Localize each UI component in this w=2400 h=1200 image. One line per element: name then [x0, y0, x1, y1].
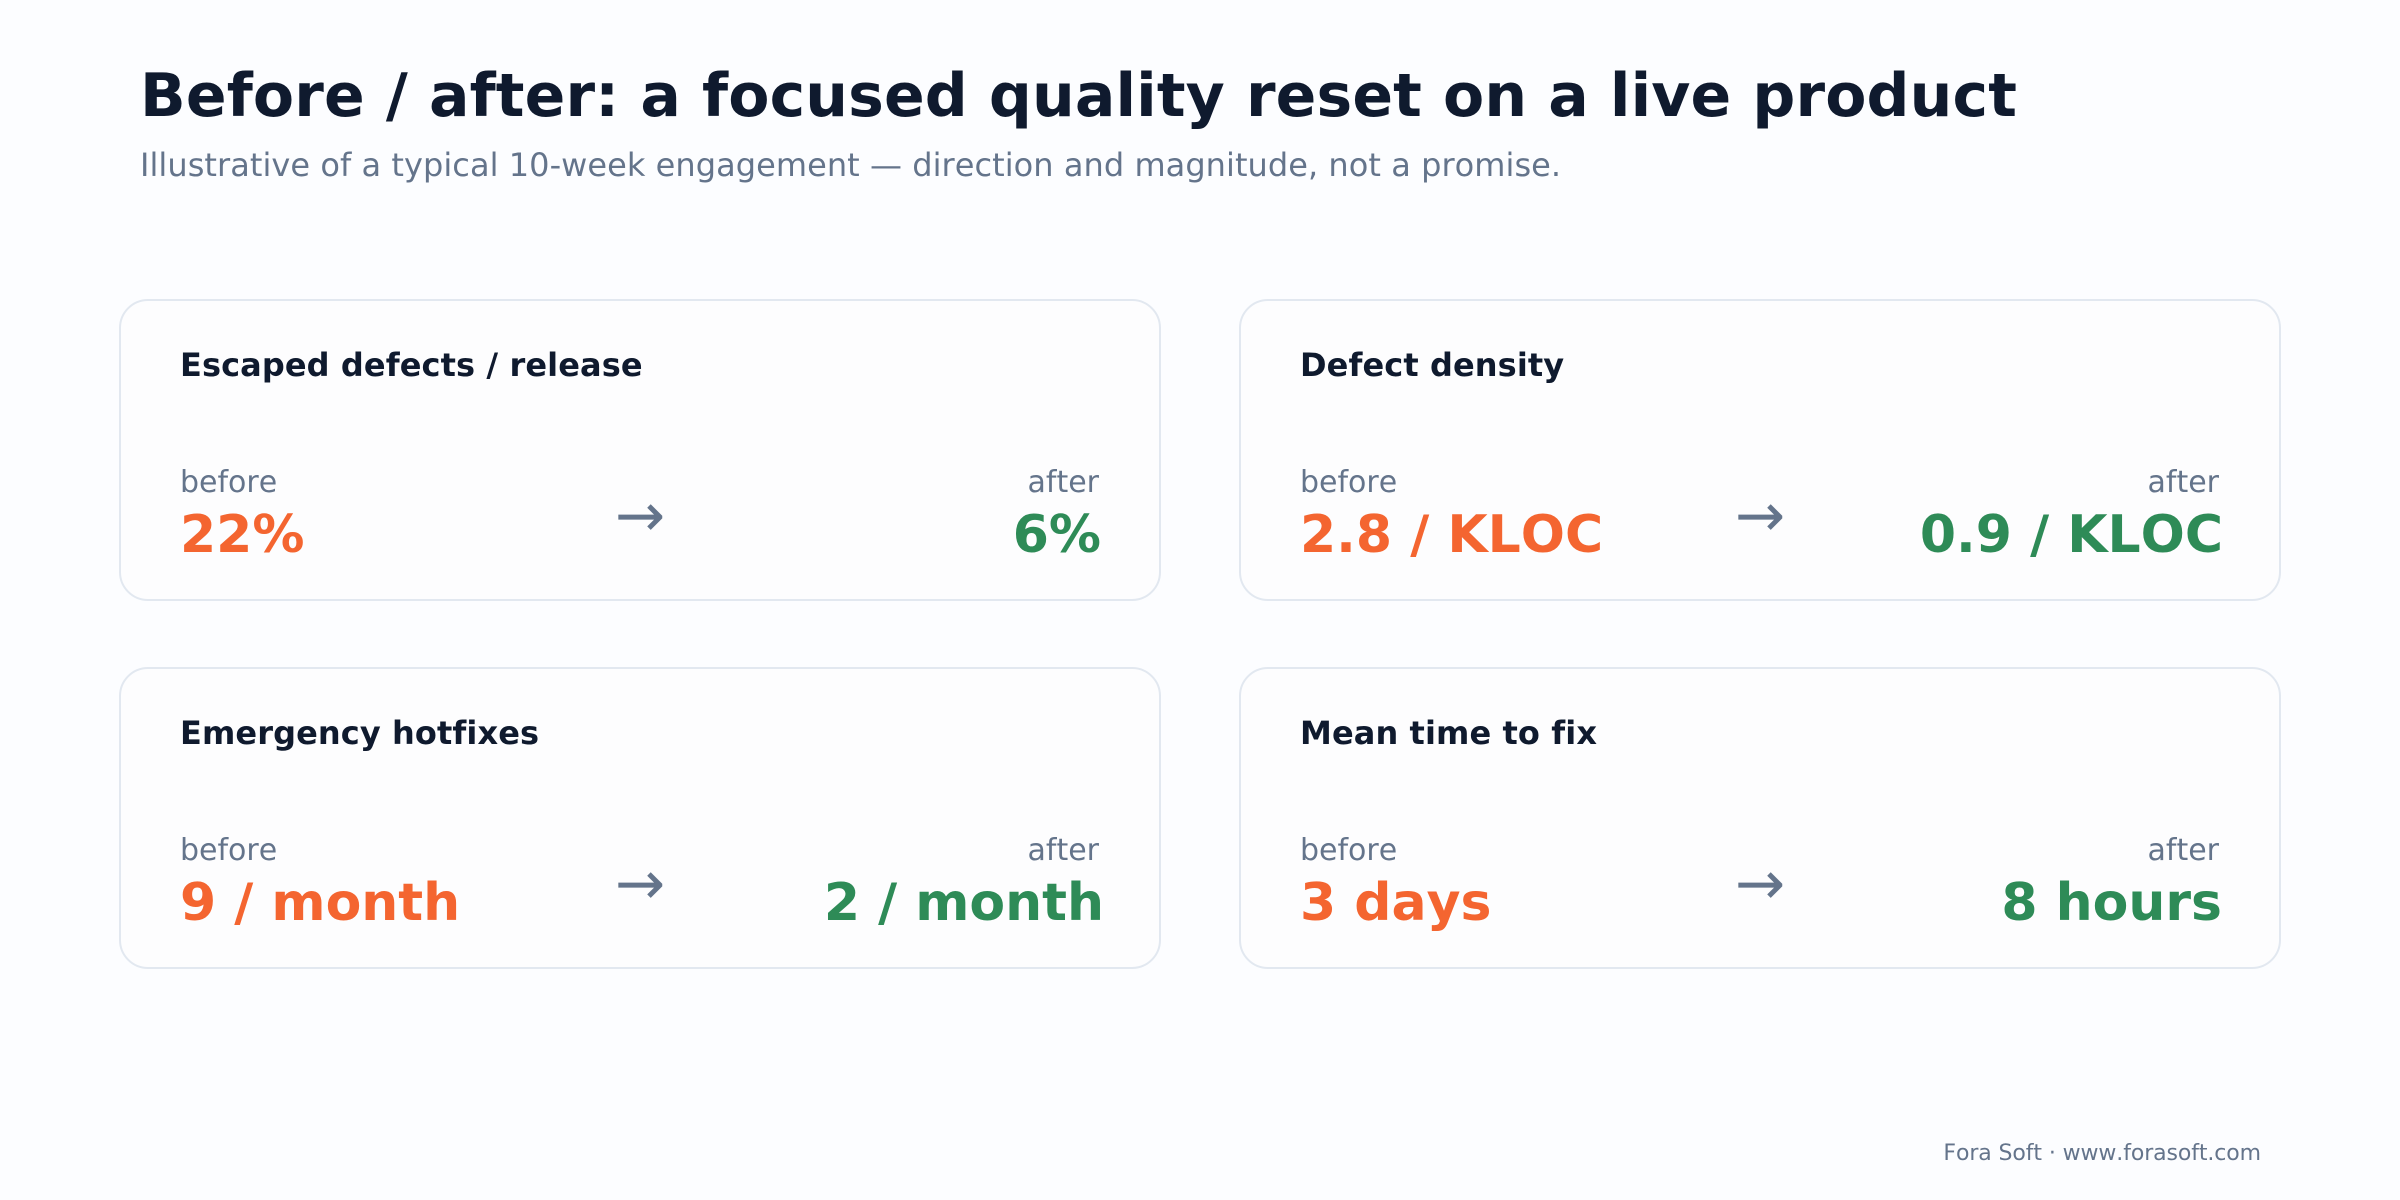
panel: mean time to fix	[1240, 668, 2280, 968]
panel: emergency hotfixes	[120, 668, 1160, 968]
heading: escaped defects: Escaped defects / release	[180, 346, 643, 384]
before label: before	[180, 833, 277, 868]
panel: escaped defects	[120, 300, 1160, 600]
subtitle: Illustrative of a typical 10-week engagement — direction and magnitude, not a promise.	[140, 146, 1561, 184]
after label: after	[1028, 465, 1100, 500]
before value: 2.8 / KLOC	[1300, 505, 1603, 565]
before value: 9 / month	[180, 873, 460, 933]
heading: mean time to fix: Mean time to fix	[1300, 714, 1597, 752]
heading: emergency hotfixes: Emergency hotfixes	[180, 714, 539, 752]
before value: 22%	[180, 505, 304, 565]
before value: 3 days	[1300, 873, 1491, 933]
arrow: →	[615, 481, 665, 551]
after label: after	[1028, 833, 1100, 868]
title: Before / after: a focused quality reset on a live product	[140, 61, 2017, 131]
after label: after	[2148, 465, 2220, 500]
before label: before	[1300, 465, 1397, 500]
after value: 6%	[1013, 505, 1101, 565]
heading: defect density: Defect density	[1300, 346, 1564, 384]
panel: defect density	[1240, 300, 2280, 600]
after value: 2 / month	[824, 873, 1104, 933]
arrow: →	[1735, 481, 1785, 551]
before label: before	[180, 465, 277, 500]
after value: 8 hours	[2001, 873, 2222, 933]
footer: Fora Soft · www.forasoft.com	[1943, 1141, 2261, 1166]
arrow: →	[1735, 849, 1785, 919]
after value: 0.9 / KLOC	[1920, 505, 2223, 565]
after label: after	[2148, 833, 2220, 868]
before label: before	[1300, 833, 1397, 868]
arrow: →	[615, 849, 665, 919]
